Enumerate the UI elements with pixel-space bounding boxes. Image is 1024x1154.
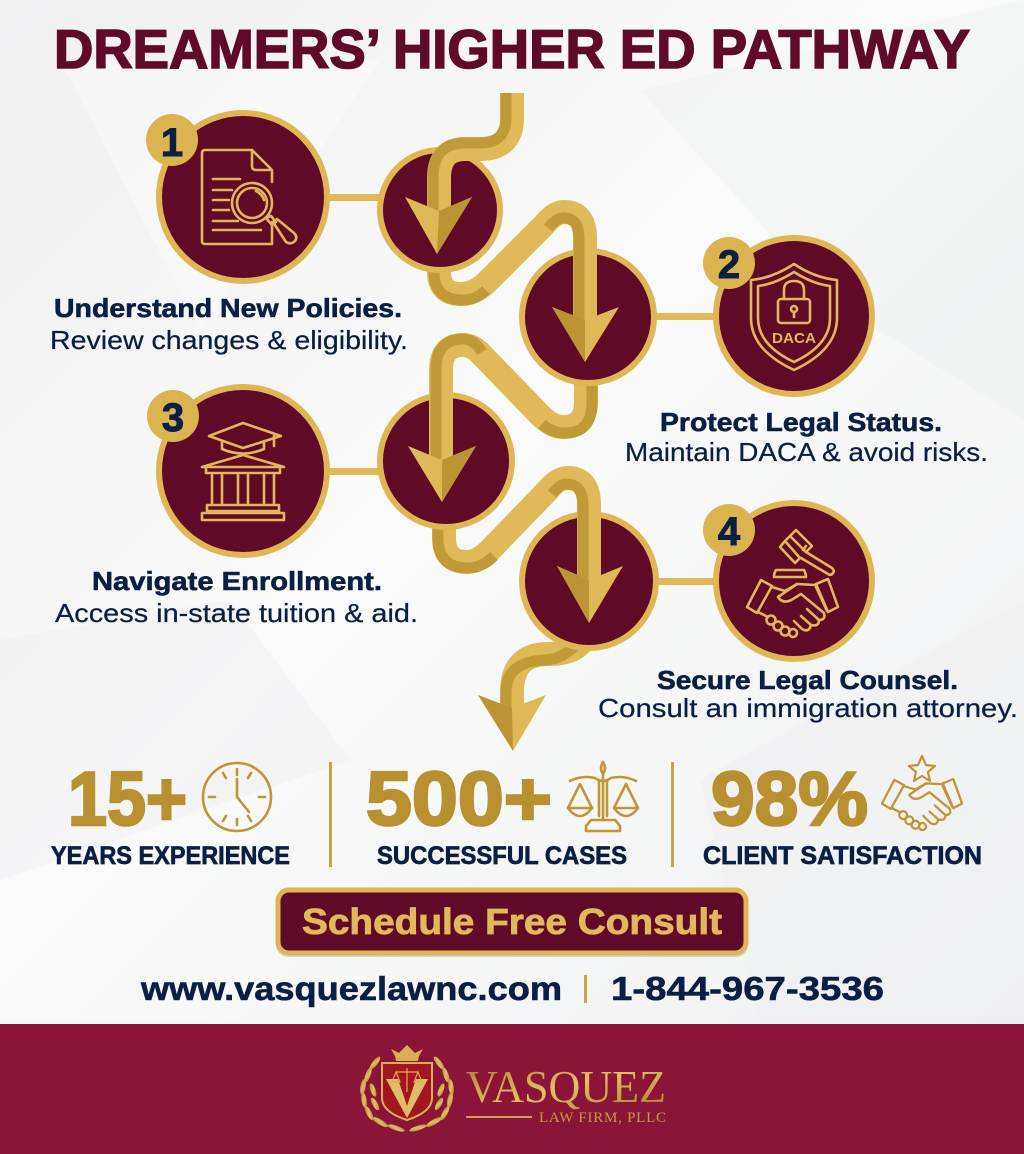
call-to-action button: [276, 890, 748, 957]
badge 1: [146, 114, 198, 166]
logo crown: [391, 1045, 423, 1061]
text block: step 1: Review changes & eligibility.: [50, 325, 408, 355]
logo laurel wreath: [359, 1055, 455, 1133]
path circle two: [522, 251, 654, 383]
footer band: [0, 1024, 1024, 1154]
logo: Vasquez Law Firm: LAW FIRM, PLLC: [539, 1110, 666, 1126]
contact line: [140, 970, 884, 1007]
badge 2: [703, 237, 755, 289]
stat: successful cases: SUCCESSFUL CASES: [377, 842, 627, 870]
stat: years experience: YEARS EXPERIENCE: [51, 842, 290, 870]
title: DREAMERS’ HIGHER ED PATHWAY: [54, 18, 970, 80]
text block: step 3: Access in-state tuition & aid.: [55, 598, 418, 628]
step 2 medallion: [703, 237, 872, 394]
icon: gavel and handshake: [747, 530, 838, 637]
text block: step 1: Understand New Policies.: [54, 293, 402, 323]
stat: client satisfaction: 98%: [711, 757, 868, 842]
text block: step 2: [625, 407, 988, 467]
stat: client satisfaction: CLIENT SATISFACTION: [703, 842, 982, 870]
icon: clock: [203, 763, 271, 831]
divider: [329, 762, 332, 867]
divider: [671, 762, 674, 867]
text block: step 3: [55, 566, 418, 628]
text block: step 4: Consult an immigration attorney.: [598, 693, 1018, 723]
step 4 medallion: [703, 503, 872, 659]
text block: step 4: [598, 665, 1018, 723]
badge 4: [703, 504, 755, 556]
shield label: DACA: [772, 330, 816, 347]
step 3 medallion: [147, 387, 327, 555]
logo: Vasquez Law Firm: [359, 1045, 666, 1133]
badge 3: 3: [162, 396, 184, 440]
stat: client satisfaction: [703, 756, 982, 870]
icon: university with graduation cap: [202, 423, 284, 520]
icon: scales of justice: [568, 762, 638, 831]
badge 3: [147, 390, 199, 442]
badge 4: 4: [718, 510, 741, 554]
icon: handshake with star: [882, 756, 962, 830]
stat: successful cases: [366, 757, 638, 870]
arrow: ribbon into circle three: [408, 339, 592, 502]
path circle three: [380, 395, 512, 527]
step 1 medallion: [146, 113, 327, 281]
badge 1: 1: [161, 121, 183, 165]
text block: step 4: Secure Legal Counsel.: [657, 665, 958, 695]
path circle one: [380, 150, 500, 270]
stat: years experience: 15+: [68, 757, 187, 842]
contact line: 1-844-967-3536: [611, 970, 884, 1007]
arrow: ribbon into circle four: [438, 478, 623, 623]
text block: step 2: Maintain DACA & avoid risks.: [625, 437, 988, 467]
call-to-action button: Schedule Free Consult: [302, 901, 722, 942]
arrow: final ribbon to stats: [478, 636, 585, 751]
icon: DACA shield with padlock: [751, 264, 837, 370]
path circle four: [522, 514, 656, 648]
stat: successful cases: 500+: [366, 757, 552, 842]
arrow: ribbon into circle two: [434, 212, 619, 362]
badge 2: 2: [718, 243, 740, 287]
arrow: ribbon into circle one: [405, 93, 512, 254]
logo shield: [382, 1063, 432, 1120]
contact line: www.vasquezlawnc.com: [140, 970, 562, 1007]
icon: document with magnifier: [202, 150, 296, 244]
connector lines: [328, 194, 716, 585]
text block: step 1: [50, 293, 408, 355]
stat: years experience: [51, 757, 290, 870]
logo: Vasquez Law Firm: VASQUEZ: [466, 1061, 666, 1112]
text block: step 3: Navigate Enrollment.: [92, 566, 382, 596]
text block: step 2: Protect Legal Status.: [660, 407, 942, 437]
